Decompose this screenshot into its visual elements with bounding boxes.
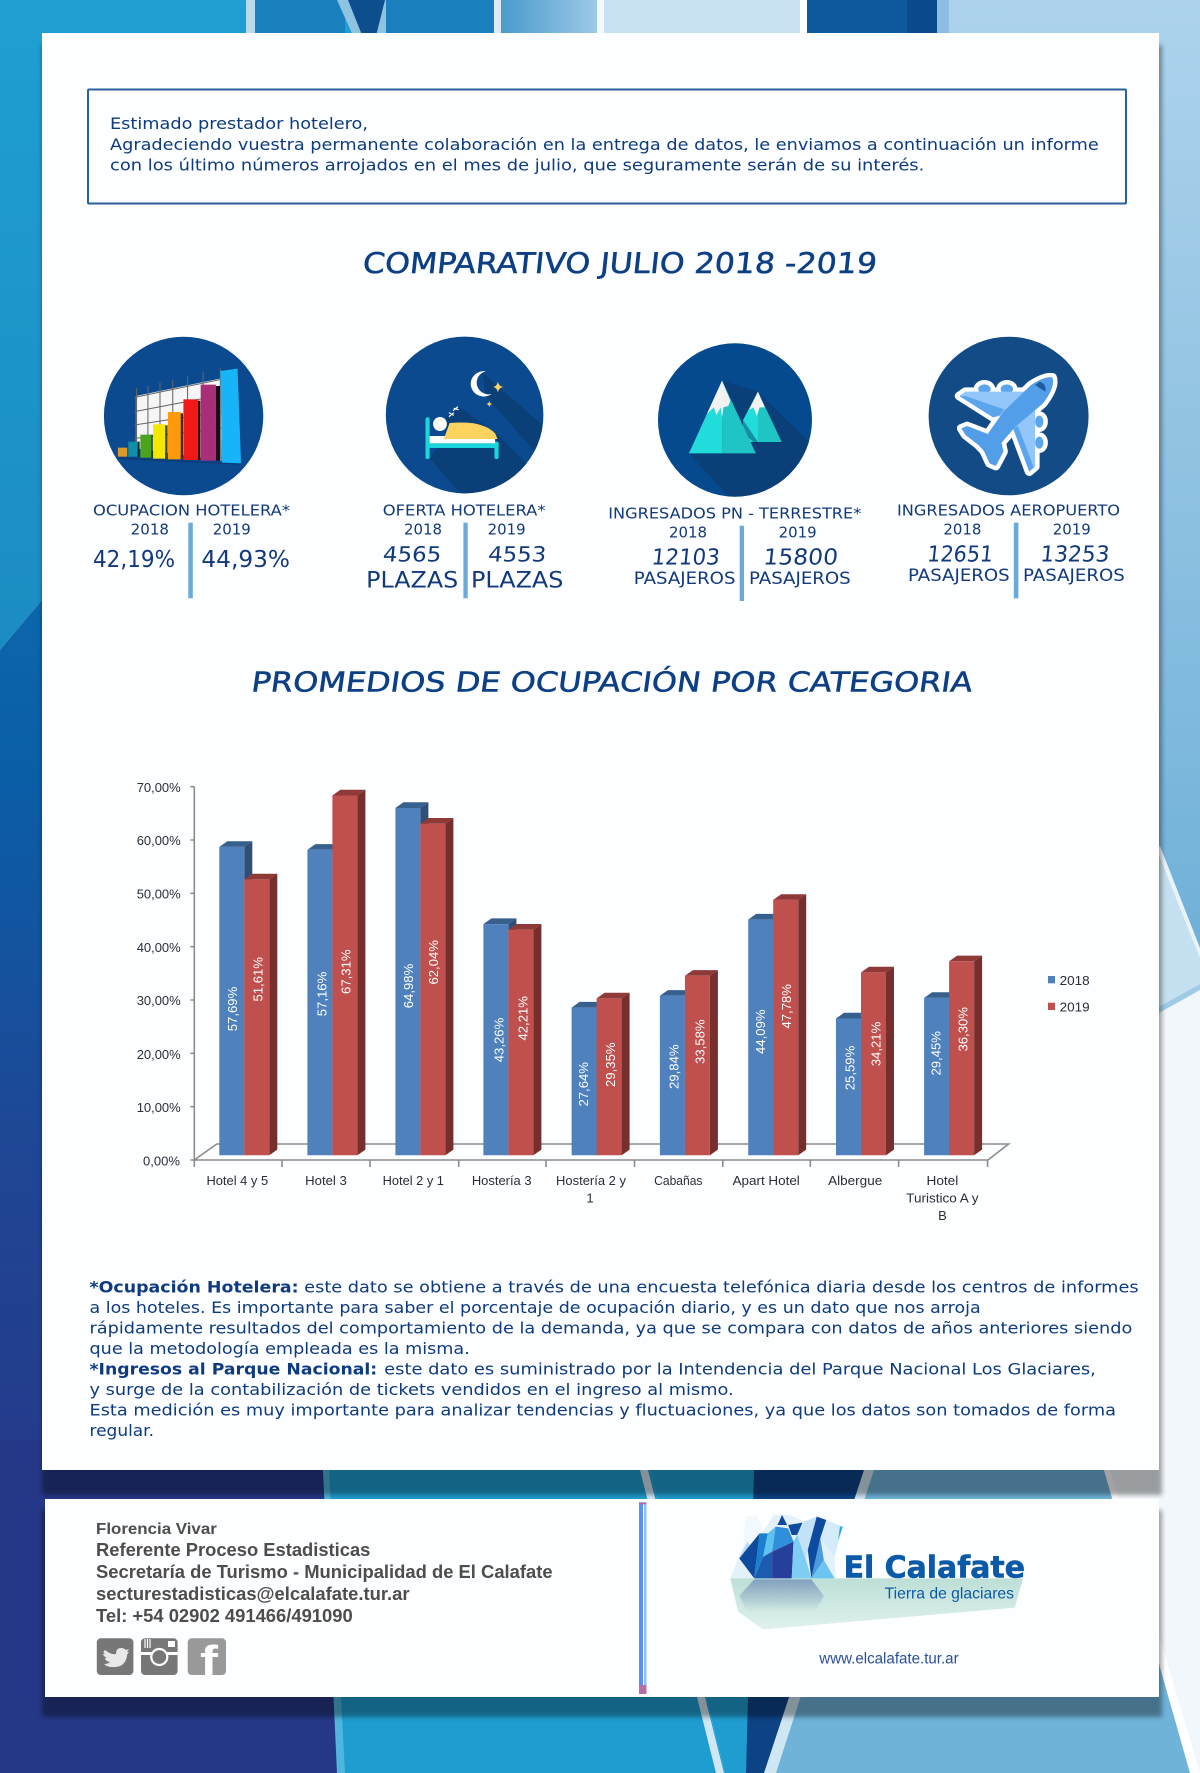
bars: Apart Hotel: 44,09% xyxy=(753,1009,768,1054)
chart category labels: Hotel xyxy=(927,1173,958,1188)
text block: footnotes: y surge de la contabilización de tickets vendidos en el ingreso al mismo. xyxy=(90,1380,734,1399)
chart legend xyxy=(1048,973,1090,1015)
stat: oferta hotelera: 2019 xyxy=(488,520,526,538)
stat: ingresados aeropuerto: 12651 xyxy=(926,542,994,567)
chart category labels: Hostería 3 xyxy=(472,1173,532,1188)
chart axis labels: 0,00% xyxy=(143,1154,180,1168)
bars: Hotel 3: 67,31% xyxy=(338,949,354,994)
chart category labels: Hostería 2 y xyxy=(556,1173,626,1188)
stat: oferta hotelera: PLAZAS xyxy=(471,569,563,594)
panel: footer card xyxy=(45,1499,1159,1697)
text block: contact details: Referente Proceso Estadisticas xyxy=(96,1539,370,1560)
bars: Hotel 3: 57,16% xyxy=(314,971,330,1016)
label: oferta hotelera: OFERTA HOTELERA* xyxy=(383,501,546,519)
icon: instagram xyxy=(141,1638,178,1675)
stat: ocupacion hotelera xyxy=(93,337,290,598)
stat: ingresados parque nacional: 2019 xyxy=(779,523,817,541)
chart category labels: Albergue xyxy=(828,1173,882,1188)
stat: ingresados parque nacional: PASAJEROS xyxy=(634,569,736,589)
chart axis labels: 40,00% xyxy=(137,940,181,955)
text block: contact details: Florencia Vivar xyxy=(96,1521,217,1538)
callout: greeting box: con los último números arrojados en el mes de julio, que seguramente serán de su interés. xyxy=(110,156,924,174)
stat: oferta hotelera: 4553 xyxy=(487,541,547,566)
chart legend: 2018 xyxy=(1060,973,1090,988)
chart axis labels: 10,00% xyxy=(137,1100,181,1115)
text block: footnotes: a los hoteles. Es importante para saber el porcentaje de ocupación diario, y es un dato que nos arroja xyxy=(90,1298,981,1317)
icon: colourful bar chart xyxy=(117,368,241,465)
chart category labels: Turistico A y xyxy=(906,1190,979,1206)
text block: contact details: Secretaría de Turismo - Municipalidad de El Calafate xyxy=(96,1561,553,1582)
bars: Hotel 4 y 5: 57,69% xyxy=(225,986,240,1031)
bars: Apart Hotel: 47,78% xyxy=(779,984,794,1029)
callout: greeting box: Estimado prestador hotelero, xyxy=(110,114,368,133)
logo: El Calafate xyxy=(730,1515,1025,1629)
label: ocupacion hotelera: OCUPACION HOTELERA* xyxy=(93,501,290,519)
bars: Apart Hotel xyxy=(748,894,806,1155)
bars: Hotel Turistico A y B: 29,45% xyxy=(929,1031,944,1076)
bars: Hotel 3 xyxy=(307,790,365,1155)
text block: footnotes: rápidamente resultados del comportamiento de la demanda, ya que se compara con datos de años anteriores siendo xyxy=(90,1318,1132,1338)
icon: facebook: f xyxy=(200,1637,218,1686)
bars: Hotel 2 y 1: 64,98% xyxy=(401,963,416,1008)
stat: oferta hotelera: PLAZAS xyxy=(366,569,458,594)
website link: www.elcalafate.tur.ar xyxy=(818,1650,959,1667)
stat: ocupacion hotelera: 44,93% xyxy=(201,547,290,573)
stat: ingresados parque nacional xyxy=(608,343,862,601)
logo iceberg mark xyxy=(730,1515,1023,1629)
logo: El Calafate: Tierra de glaciares xyxy=(885,1585,1014,1602)
bars: Hostería 3: 42,21% xyxy=(516,996,530,1041)
text block: footnotes: Esta medición es muy importante para analizar tendencias y fluctuaciones, ya que los datos son tomados de forma xyxy=(90,1400,1116,1420)
stat: ocupacion hotelera: 2018 xyxy=(131,520,169,538)
label: ingresados aeropuerto: INGRESADOS AEROPUERTO xyxy=(897,501,1120,519)
stat: ingresados parque nacional: 15800 xyxy=(762,545,839,570)
title: comparativo: COMPARATIVO JULIO 2018 -2019 xyxy=(361,246,879,280)
bars: Albergue: 25,59% xyxy=(842,1045,858,1090)
stat: ingresados aeropuerto xyxy=(897,337,1125,598)
bars: Albergue xyxy=(836,967,894,1155)
bars: Cabañas: 29,84% xyxy=(666,1044,681,1089)
chart category labels: Cabañas xyxy=(654,1173,703,1188)
text block: footnotes: regular. xyxy=(90,1421,154,1440)
chart legend: 2019 xyxy=(1060,1000,1090,1015)
stat: ingresados parque nacional: 12103 xyxy=(650,545,721,570)
text block: contact details xyxy=(96,1521,553,1626)
bars: Cabañas xyxy=(660,970,718,1155)
chart axis labels: 30,00% xyxy=(137,993,181,1008)
stat: ingresados parque nacional: 2018 xyxy=(669,523,707,541)
chart axis labels: 70,00% xyxy=(137,780,181,795)
bars: Hostería 2 y 1: 27,64% xyxy=(576,1062,591,1107)
bars: Hotel 2 y 1: 62,04% xyxy=(426,940,441,985)
bars: Hostería 2 y 1 xyxy=(572,993,630,1155)
text block: footnotes: que la metodología empleada es la misma. xyxy=(90,1339,470,1358)
logo: El Calafate: El Calafate xyxy=(844,1551,1025,1586)
icon: snowy mountains xyxy=(689,380,809,497)
icon: facebook xyxy=(188,1637,226,1686)
icon: sleeping person in bed at night xyxy=(425,371,546,495)
stat: ingresados aeropuerto: PASAJEROS xyxy=(908,566,1010,586)
callout: greeting box: Agradeciendo vuestra permanente colaboración en la entrega de datos, le enviamos a continuación un informe xyxy=(110,135,1099,154)
chart category labels: B xyxy=(938,1208,947,1223)
bars: Hotel Turistico A y B xyxy=(924,956,982,1155)
label: ingresados PN terrestre: INGRESADOS PN - TERRESTRE* xyxy=(608,504,862,522)
panel: main white report sheet xyxy=(42,33,1159,1470)
chart axis labels: 20,00% xyxy=(137,1047,181,1062)
title: promedios: PROMEDIOS DE OCUPACIÓN POR CATEGORIA xyxy=(249,665,975,699)
chart category labels: Hotel 3 xyxy=(305,1173,347,1188)
stat: ingresados aeropuerto: 13253 xyxy=(1039,542,1111,567)
stat: ingresados parque nacional: PASAJEROS xyxy=(749,569,851,589)
text block: footnotes: este dato es suministrado por la Intendencia del Parque Nacional Los Glaciares, xyxy=(384,1360,1096,1378)
text block: contact details: Tel: +54 02902 491466/491090 xyxy=(96,1605,353,1626)
footer vertical divider xyxy=(639,1502,646,1694)
text block: footnotes: este dato se obtiene a través de una encuesta telefónica diaria desde los centros de informes xyxy=(304,1278,1139,1297)
stat: oferta hotelera: 4565 xyxy=(382,541,442,566)
bars: Hotel Turistico A y B: 36,30% xyxy=(955,1007,970,1052)
bars: Hotel 4 y 5: 51,61% xyxy=(250,957,266,1002)
bars: Hostería 3 xyxy=(483,918,541,1155)
icon: twitter xyxy=(97,1638,133,1675)
bars: Hostería 3: 43,26% xyxy=(492,1017,506,1062)
stat: ocupacion hotelera: 2019 xyxy=(213,520,251,538)
callout: greeting box xyxy=(88,90,1126,204)
chart axis labels: 50,00% xyxy=(137,886,181,902)
bars: Hotel 4 y 5 xyxy=(219,841,277,1155)
stat: oferta hotelera xyxy=(366,337,563,598)
text block: contact details: secturestadisticas@elcalafate.tur.ar xyxy=(96,1583,410,1604)
chart category labels: Hotel 2 y 1 xyxy=(383,1173,444,1188)
chart axis labels xyxy=(137,780,181,1168)
stat: ingresados aeropuerto: 2018 xyxy=(943,520,981,538)
chart category labels xyxy=(206,1173,979,1223)
text block: footnotes xyxy=(90,1278,1139,1440)
bars: Hotel 2 y 1 xyxy=(395,802,453,1155)
icon: airplane xyxy=(959,377,1053,472)
text block: footnotes: *Ocupación Hotelera: xyxy=(90,1278,299,1297)
bars: Cabañas: 33,58% xyxy=(692,1019,708,1064)
chart category labels: Apart Hotel xyxy=(733,1173,800,1188)
bars: Albergue: 34,21% xyxy=(869,1021,884,1066)
stat: ocupacion hotelera: 42,19% xyxy=(93,547,175,573)
chart axis labels: 60,00% xyxy=(137,833,181,848)
stat: ingresados aeropuerto: 2019 xyxy=(1053,520,1091,538)
stat: ingresados aeropuerto: PASAJEROS xyxy=(1023,566,1125,586)
chart category labels: Hotel 4 y 5 xyxy=(206,1173,268,1188)
bar chart: promedios de ocupación por categoria xyxy=(137,780,1090,1223)
chart category labels: 1 xyxy=(586,1190,594,1206)
text block: footnotes: *Ingresos al Parque Nacional: xyxy=(90,1360,377,1378)
stat: oferta hotelera: 2018 xyxy=(404,520,442,538)
bars: Hostería 2 y 1: 29,35% xyxy=(603,1042,618,1087)
